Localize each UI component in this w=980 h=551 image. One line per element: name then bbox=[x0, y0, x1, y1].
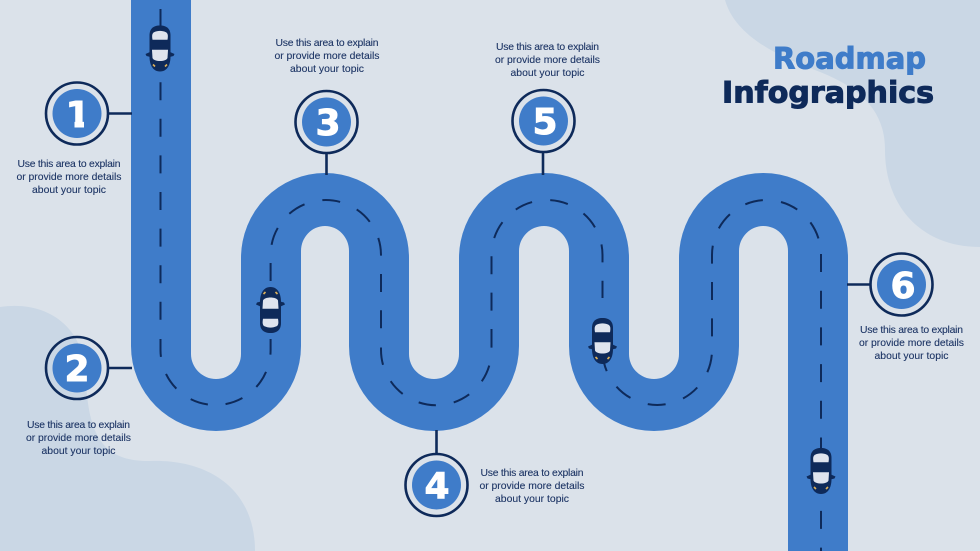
marker 1: 1 bbox=[65, 95, 91, 136]
text block 5: or provide more details bbox=[495, 55, 600, 66]
marker 6 bbox=[870, 254, 932, 316]
background blob: top right bbox=[725, 0, 980, 247]
text block 2: about your topic bbox=[42, 446, 116, 457]
text block 4: Use this area to explain bbox=[480, 468, 584, 479]
text block 1 bbox=[16, 159, 122, 196]
car 2 bbox=[256, 287, 285, 333]
car 1 bbox=[146, 26, 174, 72]
text block 5: Use this area to explain bbox=[496, 42, 599, 53]
marker 2 bbox=[46, 337, 108, 399]
text block 4 bbox=[480, 468, 584, 505]
marker 2: 2 bbox=[64, 349, 90, 390]
marker 3: 3 bbox=[315, 103, 341, 144]
text block 6: or provide more details bbox=[859, 338, 964, 349]
text block 3 bbox=[274, 38, 380, 75]
text block 2 bbox=[26, 420, 131, 457]
text block 5 bbox=[495, 42, 600, 79]
text block 3: Use this area to explain bbox=[276, 38, 379, 49]
marker 4: 4 bbox=[424, 466, 450, 507]
text block 2: Use this area to explain bbox=[27, 420, 130, 431]
text block 6 bbox=[859, 325, 964, 362]
text block 4: or provide more details bbox=[480, 481, 584, 492]
text block 3: or provide more details bbox=[274, 51, 380, 62]
background blob: bottom left bbox=[0, 306, 255, 551]
text block 1: about your topic bbox=[32, 185, 106, 196]
car 4 bbox=[806, 448, 836, 494]
text block 6: Use this area to explain bbox=[860, 325, 963, 336]
marker 4 bbox=[406, 454, 468, 516]
marker 3 bbox=[296, 91, 358, 153]
marker 6: 6 bbox=[890, 266, 916, 307]
text block 2: or provide more details bbox=[26, 433, 131, 444]
text block 4: about your topic bbox=[495, 494, 569, 505]
text block 6: about your topic bbox=[874, 351, 948, 362]
text block 5: about your topic bbox=[510, 68, 584, 79]
title: Infographics bbox=[722, 76, 934, 110]
road centre dashes bbox=[160, 0, 821, 551]
text block 1: or provide more details bbox=[16, 172, 122, 183]
marker 1 bbox=[46, 82, 108, 144]
connector lines bbox=[108, 114, 871, 454]
title: Roadmap bbox=[773, 42, 926, 76]
car 3 bbox=[588, 318, 617, 364]
marker 5: 5 bbox=[532, 102, 558, 143]
marker 5 bbox=[512, 90, 574, 152]
text block 3: about your topic bbox=[290, 64, 364, 75]
winding road bbox=[131, 0, 848, 551]
text block 1: Use this area to explain bbox=[18, 159, 121, 170]
title bbox=[722, 42, 934, 110]
